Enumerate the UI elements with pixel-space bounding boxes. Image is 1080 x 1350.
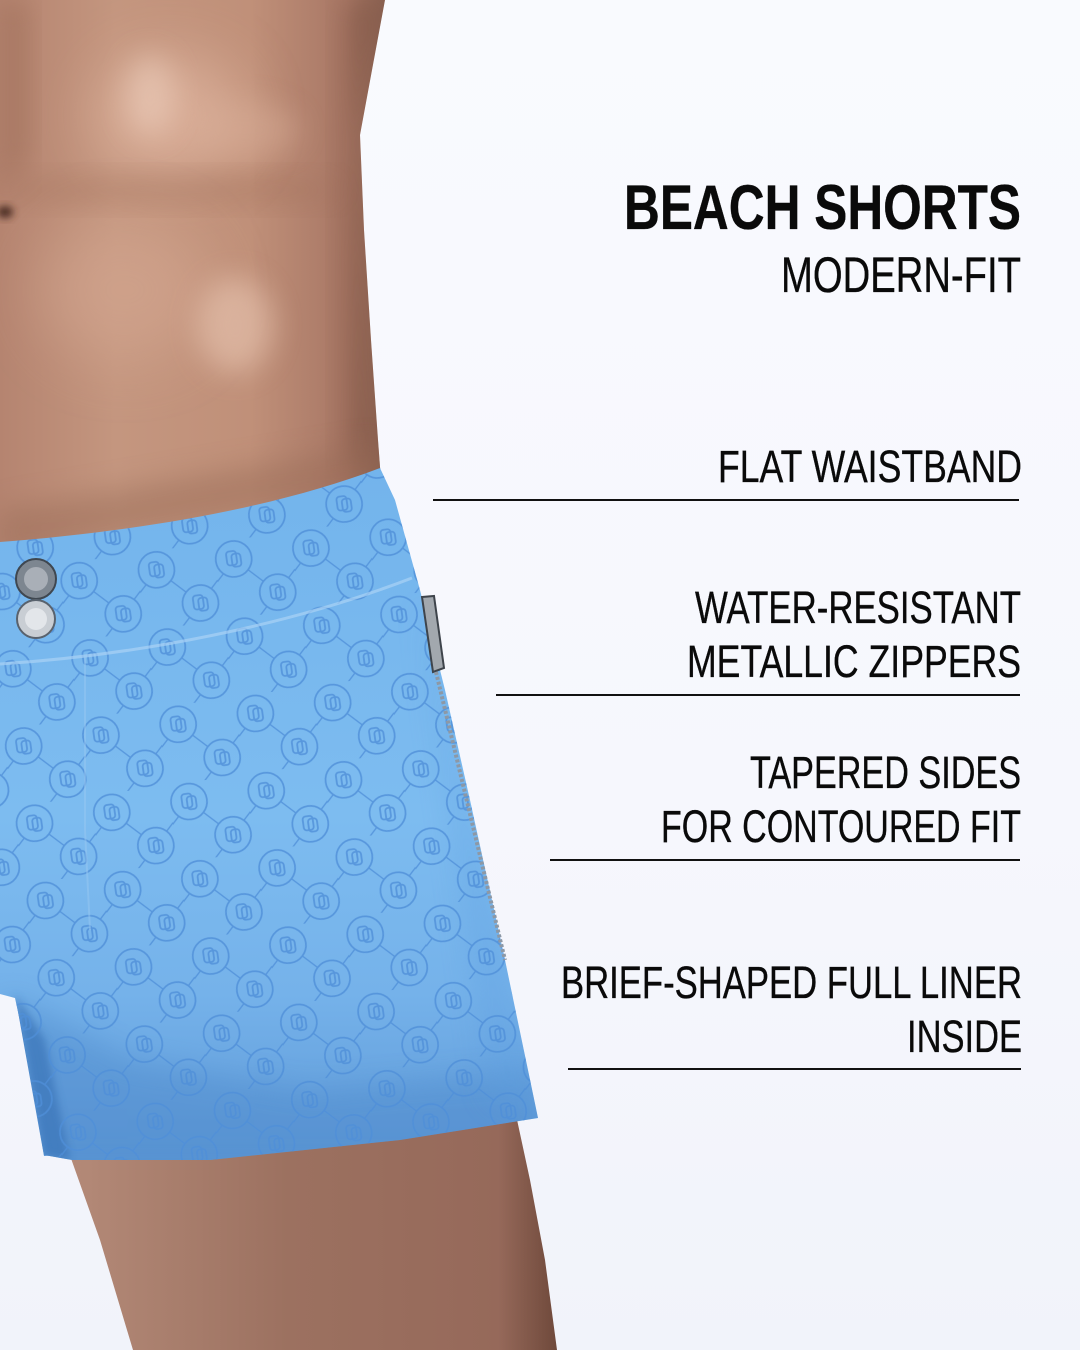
photo: model thigh xyxy=(68,1115,557,1350)
waistband seam xyxy=(0,578,412,664)
shorts lower panel shading xyxy=(0,590,540,1170)
feature: tapered sides xyxy=(550,747,1021,861)
feature: brief liner xyxy=(561,957,1022,1070)
icon: metallic side zipper xyxy=(422,596,505,960)
feature: brief liner: INSIDE xyxy=(907,1011,1022,1062)
feature: zippers xyxy=(496,582,1021,696)
shorts monogram print xyxy=(0,468,538,1160)
shorts inner shadowed panel xyxy=(15,995,120,1156)
photo: blue beach shorts xyxy=(0,468,540,1170)
photo: model torso xyxy=(0,0,385,560)
icon: waist buttons xyxy=(16,559,56,638)
shorts body xyxy=(0,468,538,1160)
